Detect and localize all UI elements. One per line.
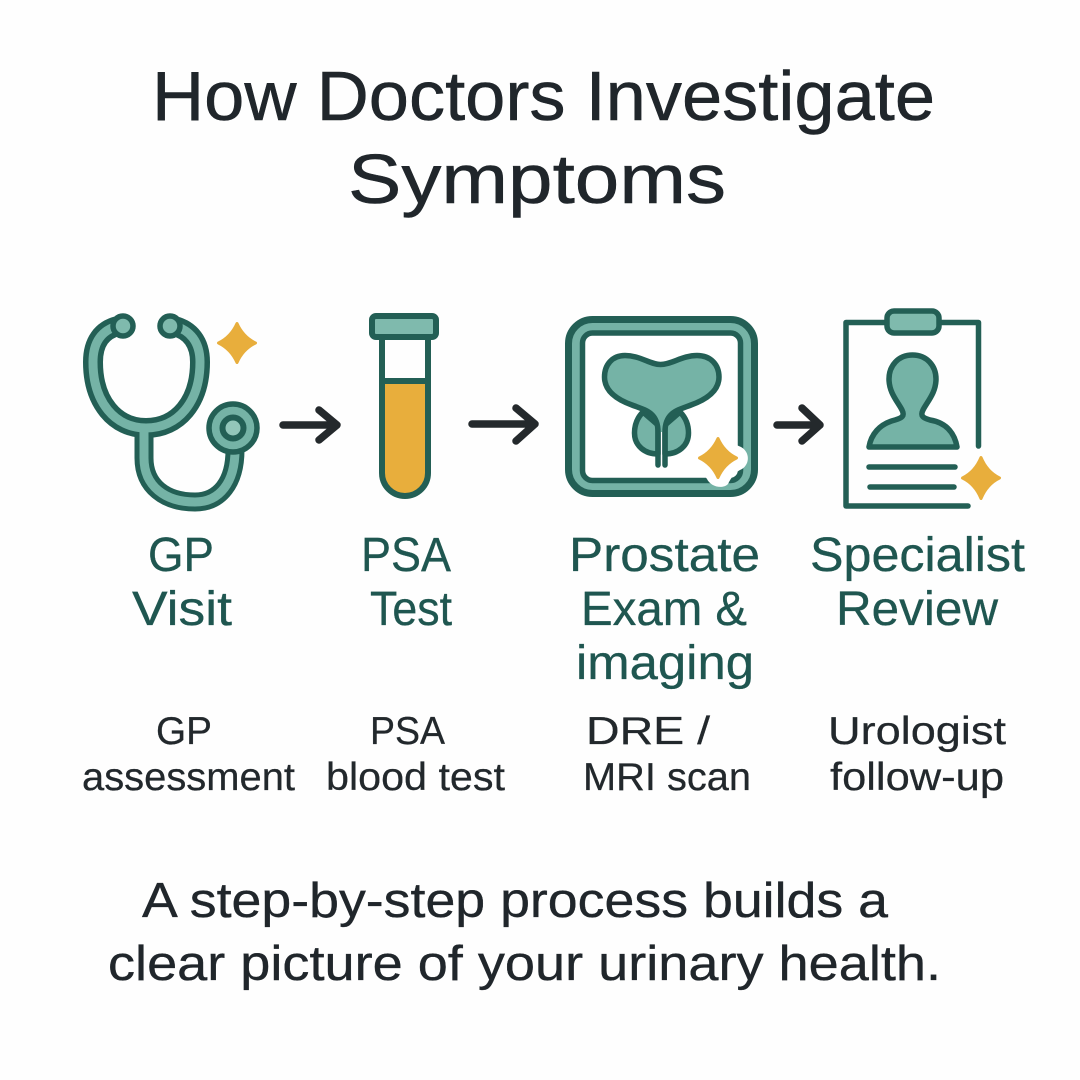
label: Specialist Review: Review: [836, 583, 998, 636]
title: Symptoms: [348, 140, 726, 218]
closing statement: [108, 874, 941, 991]
label: PSA Test: PSA: [361, 529, 451, 582]
description: GP assessment: [82, 710, 295, 799]
description: GP assessment: GP: [156, 710, 212, 753]
icon: clipboard with patient profile: [846, 311, 1000, 506]
label: Specialist Review: Specialist: [810, 529, 1025, 582]
description: PSA blood test: [326, 710, 505, 799]
description: GP assessment: assessment: [82, 756, 295, 799]
title: How Doctors Investigate: [152, 57, 935, 135]
label: PSA Test: Test: [370, 583, 452, 636]
label: Prostate Exam and imaging: Prostate: [569, 529, 760, 582]
icon: test tube: [372, 316, 436, 496]
icon: stethoscope: [93, 316, 257, 502]
arrow: PSA to exam: [472, 408, 535, 441]
description: DRE / MRI scan: DRE /: [586, 710, 710, 753]
label: GP Visit: Visit: [132, 583, 232, 636]
label: GP Visit: GP: [148, 529, 214, 582]
label: PSA Test: [361, 529, 452, 636]
arrow: exam to specialist: [777, 408, 820, 441]
description: DRE / MRI scan: MRI scan: [583, 756, 751, 799]
label: Prostate Exam and imaging: Exam &: [581, 583, 747, 636]
description: PSA blood test: blood test: [326, 756, 505, 799]
description: Urologist follow-up: Urologist: [828, 710, 1006, 753]
label: GP Visit: [132, 529, 232, 636]
icon: sparkle: [218, 324, 256, 362]
icon: prostate scan: [568, 320, 754, 494]
description: Urologist follow-up: [828, 710, 1006, 799]
label: Prostate Exam and imaging: imaging: [576, 637, 754, 690]
title: [152, 57, 935, 218]
closing statement: clear picture of your urinary health.: [108, 937, 941, 991]
description: Urologist follow-up: follow-up: [830, 756, 1004, 799]
description: DRE / MRI scan: [583, 710, 751, 799]
closing statement: A step-by-step process builds a: [142, 874, 889, 928]
label: Prostate Exam and imaging: [569, 529, 760, 690]
arrow: GP to PSA: [283, 410, 337, 440]
description: PSA blood test: PSA: [370, 710, 445, 753]
label: Specialist Review: [810, 529, 1025, 636]
